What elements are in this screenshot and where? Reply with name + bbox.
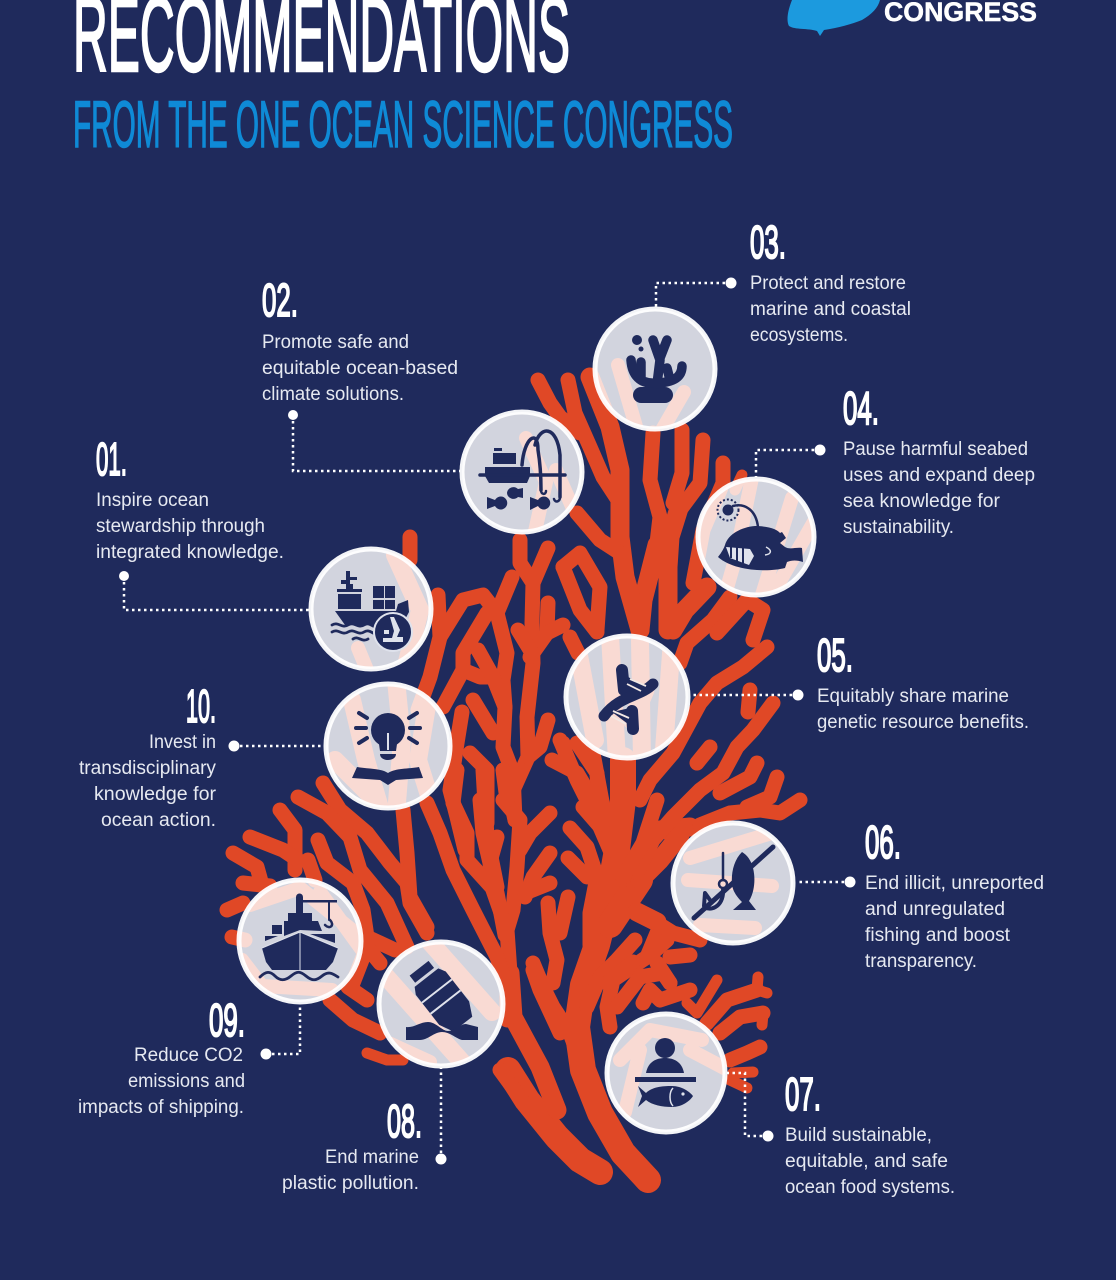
text block 06: End illicit, unreported (865, 873, 1044, 894)
text block 09: 09. (209, 994, 245, 1046)
icon disc 05: DNA (566, 636, 688, 758)
text block 03: 03. (750, 216, 786, 268)
text block 07: 07. (785, 1068, 821, 1120)
icon disc 02: ship with carbon capture and fish (462, 412, 582, 532)
icon disc 09: cargo ship with crane (239, 880, 361, 1002)
text block 06: fishing and boost (865, 925, 1011, 946)
text block 07: ocean food systems. (785, 1177, 955, 1198)
text block 04: uses and expand deep (843, 465, 1035, 486)
text block 05: 05. (817, 629, 853, 681)
icon disc 01: science ship with microscope (311, 549, 431, 669)
icon disc 07: person above fish (607, 1014, 725, 1132)
text block 01: 01. (96, 433, 127, 485)
text block 05: genetic resource benefits. (817, 712, 1029, 733)
text block 07: equitable, and safe (785, 1151, 948, 1172)
text block 05 (817, 629, 1029, 733)
text block 02 (262, 274, 458, 405)
text block 01 (96, 433, 284, 563)
text block 09 (78, 994, 245, 1118)
text block 09: Reduce CO2 (134, 1045, 243, 1066)
text block 04: 04. (843, 382, 879, 434)
text block 06: 06. (865, 816, 901, 868)
text block 03 (750, 216, 911, 346)
text block 10: knowledge for (94, 784, 217, 805)
text block 06 (865, 816, 1044, 972)
text block 01: stewardship through (96, 516, 265, 537)
icon disc 03: coral (595, 309, 715, 429)
text block 01: integrated knowledge. (96, 542, 284, 563)
text block 04: sustainability. (843, 517, 954, 538)
text block 05: Equitably share marine (817, 686, 1009, 707)
icon disc 06: illegal fishing (673, 823, 793, 943)
icon disc 10: light bulb and book (326, 684, 450, 808)
text block 04: Pause harmful seabed (843, 439, 1028, 460)
text block 08 (282, 1095, 422, 1194)
icon disc 04: anglerfish (698, 479, 814, 595)
text block 03: Protect and restore (750, 273, 906, 294)
text block 10: transdisciplinary (79, 758, 216, 779)
text block 06: transparency. (865, 951, 977, 972)
text block 08: End marine (325, 1147, 419, 1168)
text block 08: 08. (387, 1095, 422, 1147)
logo: One Ocean Science Congress (788, 0, 1037, 36)
text block 01: Inspire ocean (96, 490, 209, 511)
text block 02: 02. (262, 274, 298, 326)
text block 02: equitable ocean-based (262, 358, 458, 379)
text block 02: Promote safe and (262, 332, 409, 353)
text: 10. (186, 680, 216, 732)
text block 04 (843, 382, 1035, 538)
text block 10 (79, 680, 217, 831)
chart: coral illustration (227, 365, 815, 1180)
text block 07: Build sustainable, (785, 1125, 932, 1146)
text block 07 (785, 1068, 955, 1198)
text block 03: ecosystems. (750, 325, 848, 346)
text block 02: climate solutions. (262, 384, 404, 405)
icon disc 08: plastic bottle in water (379, 942, 503, 1066)
connector lines (119, 278, 856, 1164)
text block 03: marine and coastal (750, 299, 911, 320)
text block 09: impacts of shipping. (78, 1097, 244, 1118)
text block 10: Invest in (149, 732, 216, 753)
text block 09: emissions and (128, 1071, 245, 1092)
text block 08: plastic pollution. (282, 1173, 419, 1194)
text block 04: sea knowledge for (843, 491, 1001, 512)
text block 06: and unregulated (865, 899, 1005, 920)
text block 10: ocean action. (101, 810, 216, 831)
